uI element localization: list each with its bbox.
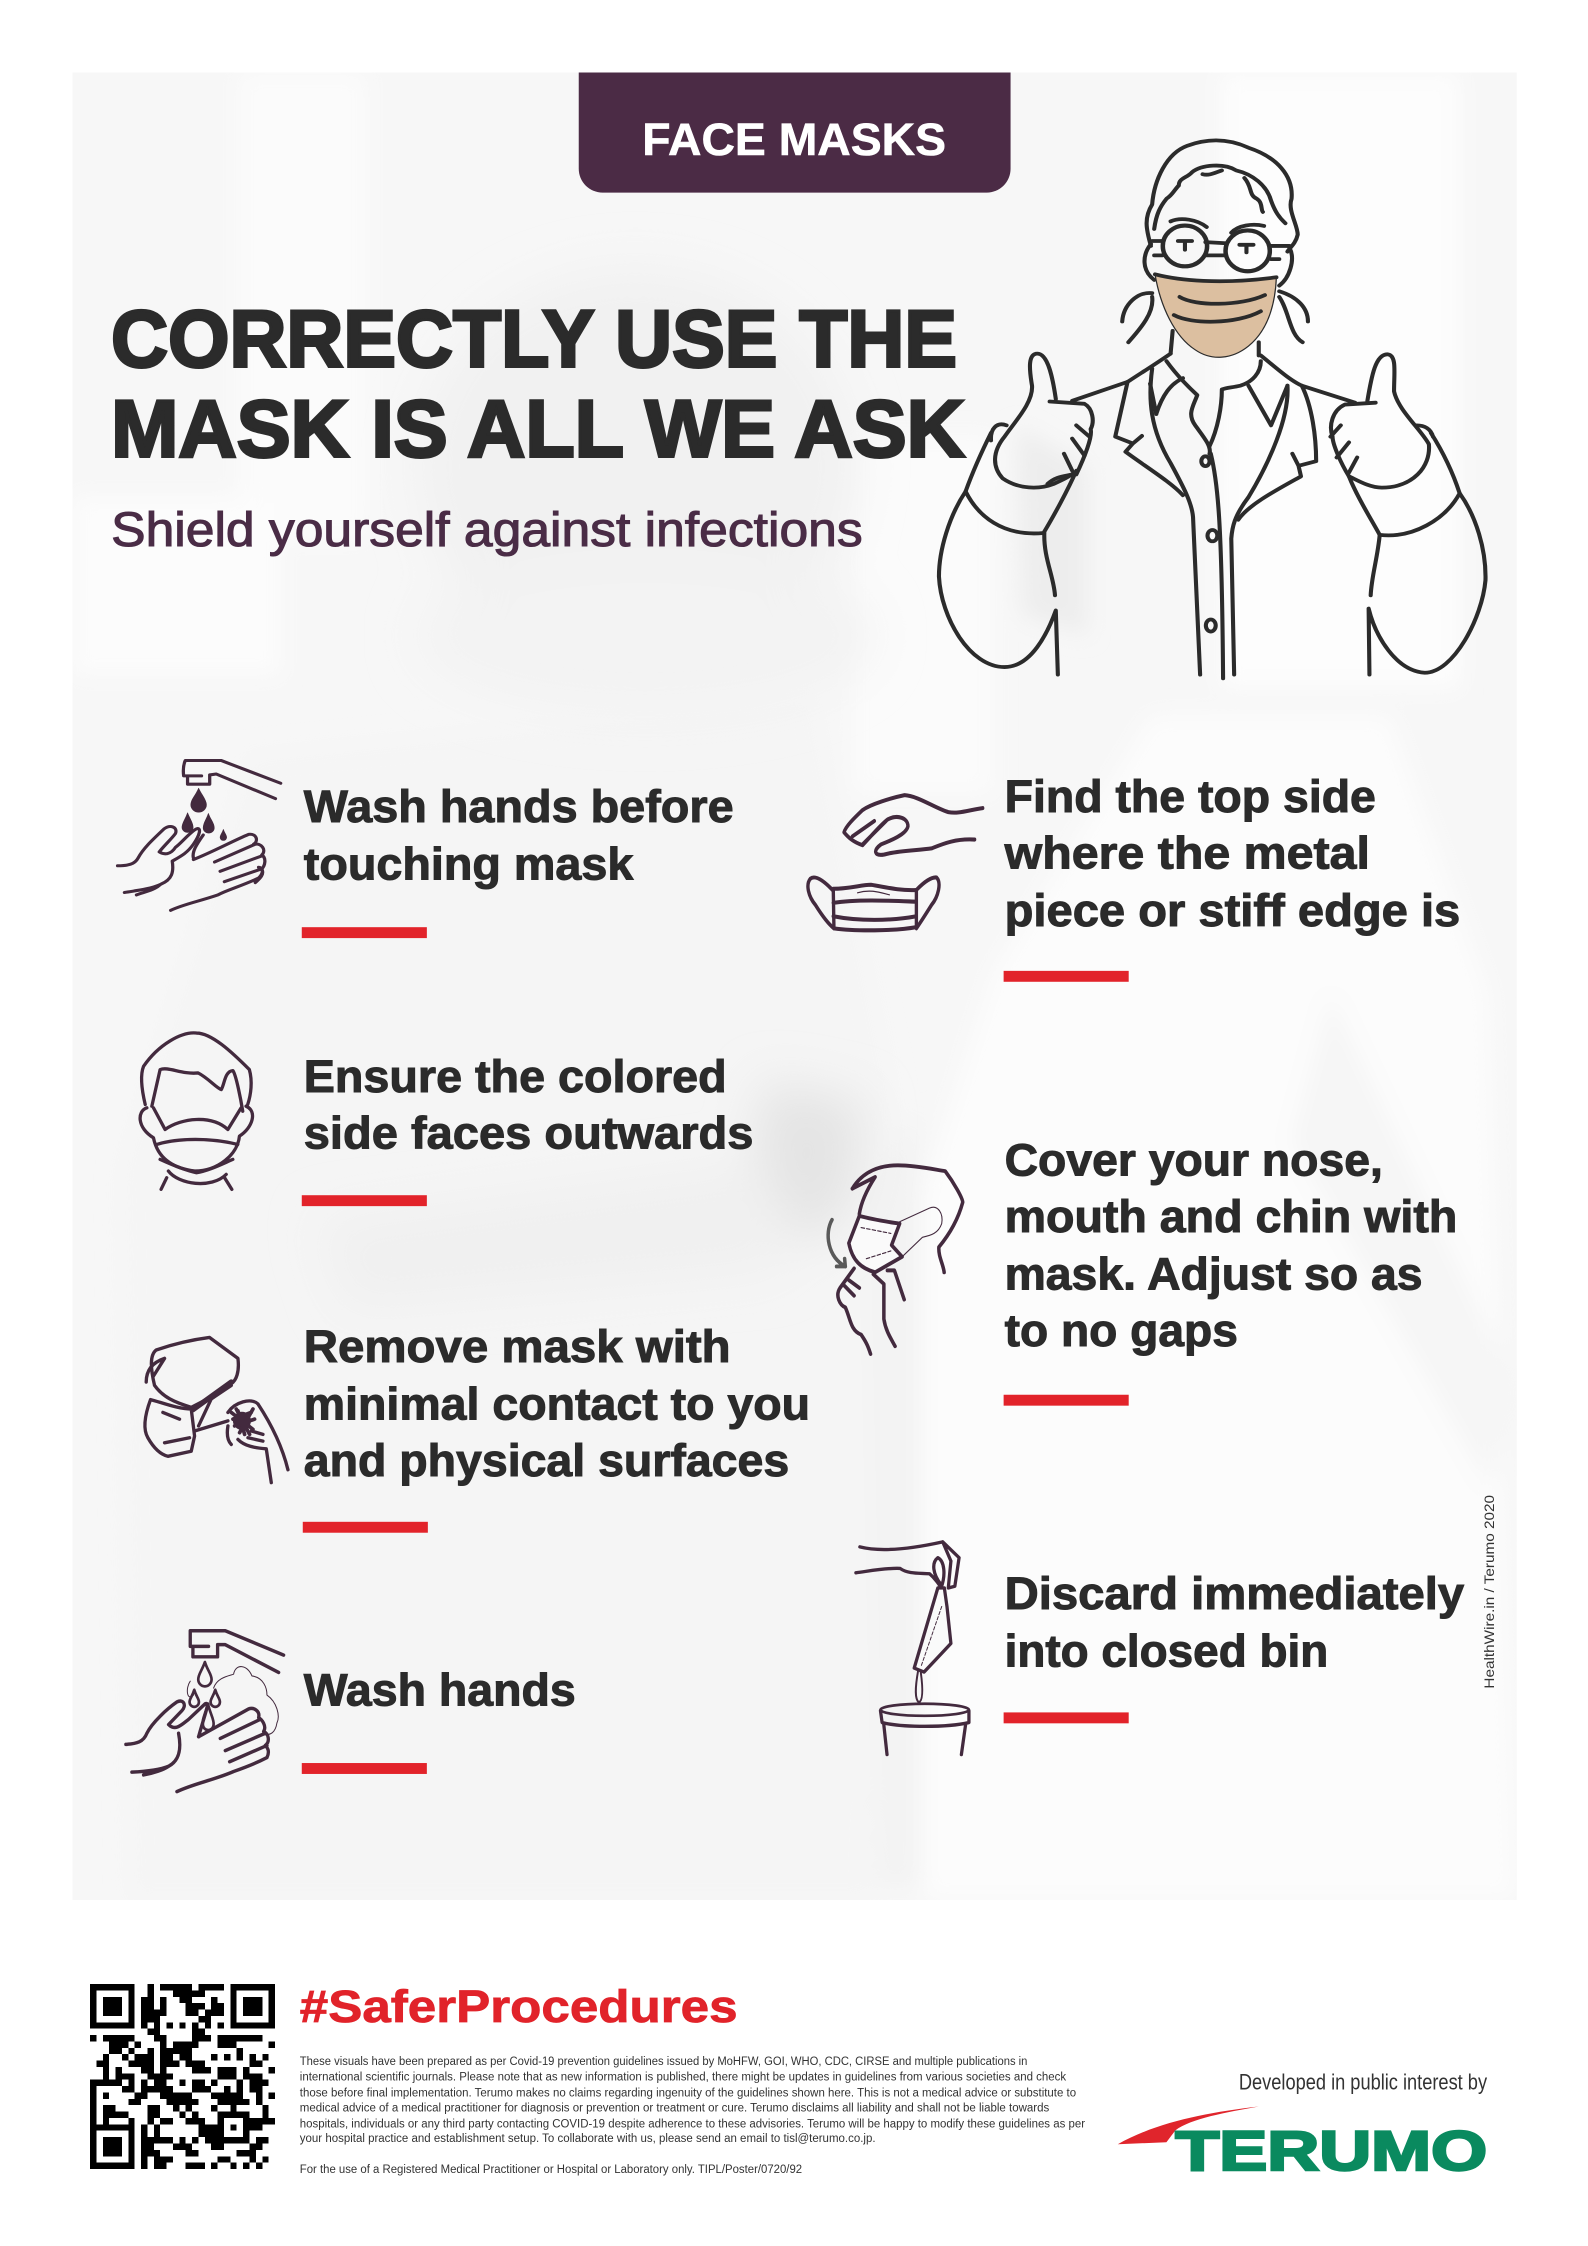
icon: adjusting mask on face [828,1165,963,1354]
step text: into closed bin [1005,1626,1328,1677]
step: remove mask with minimal contact [145,1321,810,1533]
QR code [90,1984,275,2169]
step text: mouth and chin with [1005,1191,1457,1242]
red bar [1004,971,1129,982]
icon: removing mask from head [145,1337,288,1483]
disclaimer text: For the use of a Registered Medical Practitioner or Hospital or Laboratory only. TIPL/Poster/0720/92 [300,2162,802,2176]
logo swoosh [1118,2107,1259,2144]
red bar [302,1763,427,1774]
disclaimer text: those before final implementation. Terumo makes no claims regarding ingenuity of the guidelines shown here. This is not a medical advice or substitute to [300,2086,1076,2100]
developed in public interest label: Developed in public interest by [1239,2070,1487,2095]
step: cover nose, mouth and chin [828,1134,1457,1406]
step text: mask. Adjust so as [1005,1249,1423,1300]
step text [1005,1568,1465,1677]
step text: Discard immediately [1005,1568,1465,1619]
step text [1005,1134,1457,1356]
step text: Wash hands [304,1664,576,1715]
title tab [579,72,1011,193]
icon: doctor giving thumbs up with mask [939,140,1486,678]
tab label: FACE MASKS [642,114,946,165]
icon: head wearing mask [140,1033,253,1189]
icon: tap and hands [118,760,281,910]
disclaimer text [300,2054,1085,2176]
disclaimer text: hospitals, individuals or any third party contacting COVID-19 despite adherence to these advisories. Terumo will be happy to modify these guidelines as per [300,2116,1085,2130]
step text: minimal contact to you [304,1379,810,1430]
step: find the top side [808,771,1460,982]
hashtag: #SaferProcedures [300,1981,738,2032]
main heading: CORRECTLY USE THE [111,294,957,384]
step text: side faces outwards [304,1108,753,1159]
icon: dropping mask into bin [856,1542,969,1755]
logo wordmark: TERUMO [1175,2120,1487,2182]
step text: piece or stiff edge is [1005,885,1460,936]
step text: where the metal [1004,828,1370,879]
step text: Wash hands before [304,781,734,832]
main heading [111,294,965,475]
red bar [302,1195,427,1206]
disclaimer text: your hospital practice and establishment setup. To collaborate with us, please send an email to tisl@terumo.co.jp. [300,2131,876,2145]
red bar [1004,1712,1129,1723]
step: ensure the colored side faces outwards [140,1033,753,1206]
disclaimer text: medical advice of a medical practitioner for diagnosis or prevention or treatment or cure. Terumo disclaims all liability and shall not be liable towards [300,2100,1049,2114]
step text [304,1051,753,1159]
icon: tap, soap and hands [126,1631,284,1792]
icon: hand above mask [808,795,983,930]
step text: Ensure the colored [304,1051,727,1102]
step text [1004,771,1460,936]
step text: Remove mask with [304,1321,731,1372]
subheading: Shield yourself against infections [111,503,863,557]
step text: and physical surfaces [304,1435,789,1486]
main heading: MASK IS ALL WE ASK [111,385,965,475]
background photo panel: faded medical staff [72,72,1517,1900]
credit vertical text: HealthWire.in / Terumo 2020 [1481,1495,1497,1689]
step text: Cover your nose, [1005,1134,1383,1185]
step text [304,1321,810,1486]
disclaimer text: These visuals have been prepared as per Covid-19 prevention guidelines issued by MoHFW, GOI, WHO, CDC, CIRSE and multiple publications in [300,2054,1027,2068]
red bar [302,927,427,938]
step: wash hands [126,1631,576,1792]
Terumo logo [1118,2107,1487,2182]
red bar [1004,1395,1129,1406]
step text: Find the top side [1005,771,1376,822]
step: discard immediately into closed bin [856,1542,1465,1755]
step text: touching mask [304,839,634,890]
step: wash hands before touching mask [118,760,734,938]
step text: to no gaps [1005,1305,1238,1356]
step text [304,781,734,890]
red bar [303,1522,428,1533]
disclaimer text: international scientific journals. Please note that as new information is published, there might be updates in guidelines from various societies and check [300,2070,1067,2084]
